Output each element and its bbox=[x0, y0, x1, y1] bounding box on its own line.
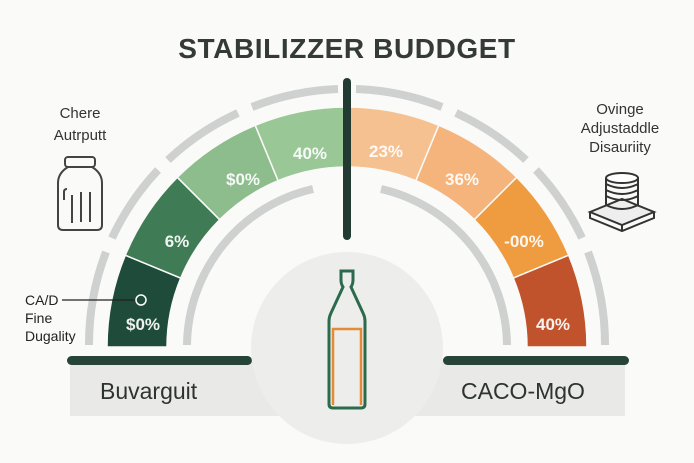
inner gray arc bbox=[187, 189, 507, 345]
title: STABILIZZER BUDDGET bbox=[178, 33, 516, 64]
right top label: Disauriity bbox=[589, 139, 651, 156]
segment labels: 6% bbox=[165, 232, 189, 251]
bottom left label: Buvarguit bbox=[100, 378, 198, 404]
segment labels: 40% bbox=[536, 315, 570, 334]
segment labels bbox=[126, 142, 570, 334]
segment labels: $0% bbox=[126, 315, 160, 334]
callout: CA/D: Dugality bbox=[25, 328, 76, 344]
icon: jar bbox=[58, 157, 102, 230]
center circle bbox=[251, 252, 443, 444]
gauge segments bbox=[107, 107, 587, 347]
needle bbox=[343, 82, 351, 236]
outer gray arc bbox=[89, 89, 605, 345]
callout: CA/D bbox=[25, 292, 146, 344]
segment labels: 40% bbox=[293, 144, 327, 163]
left top label: Chere bbox=[60, 105, 100, 122]
icon: bottle bbox=[329, 271, 365, 408]
icon: stack bbox=[590, 173, 654, 231]
right top label: Ovinge bbox=[596, 101, 644, 118]
segment labels: 23% bbox=[369, 142, 403, 161]
segment labels: $0% bbox=[226, 170, 260, 189]
segment labels: -00% bbox=[504, 232, 544, 251]
bottom right label: CACO-MgO bbox=[461, 378, 585, 404]
left top label: Autrputt bbox=[54, 127, 107, 144]
segment labels: 36% bbox=[445, 170, 479, 189]
bottom panel bbox=[67, 356, 629, 416]
callout: CA/D: CA/D bbox=[25, 292, 58, 308]
right top label: Adjustaddle bbox=[581, 120, 659, 137]
callout: CA/D: Fine bbox=[25, 310, 52, 326]
